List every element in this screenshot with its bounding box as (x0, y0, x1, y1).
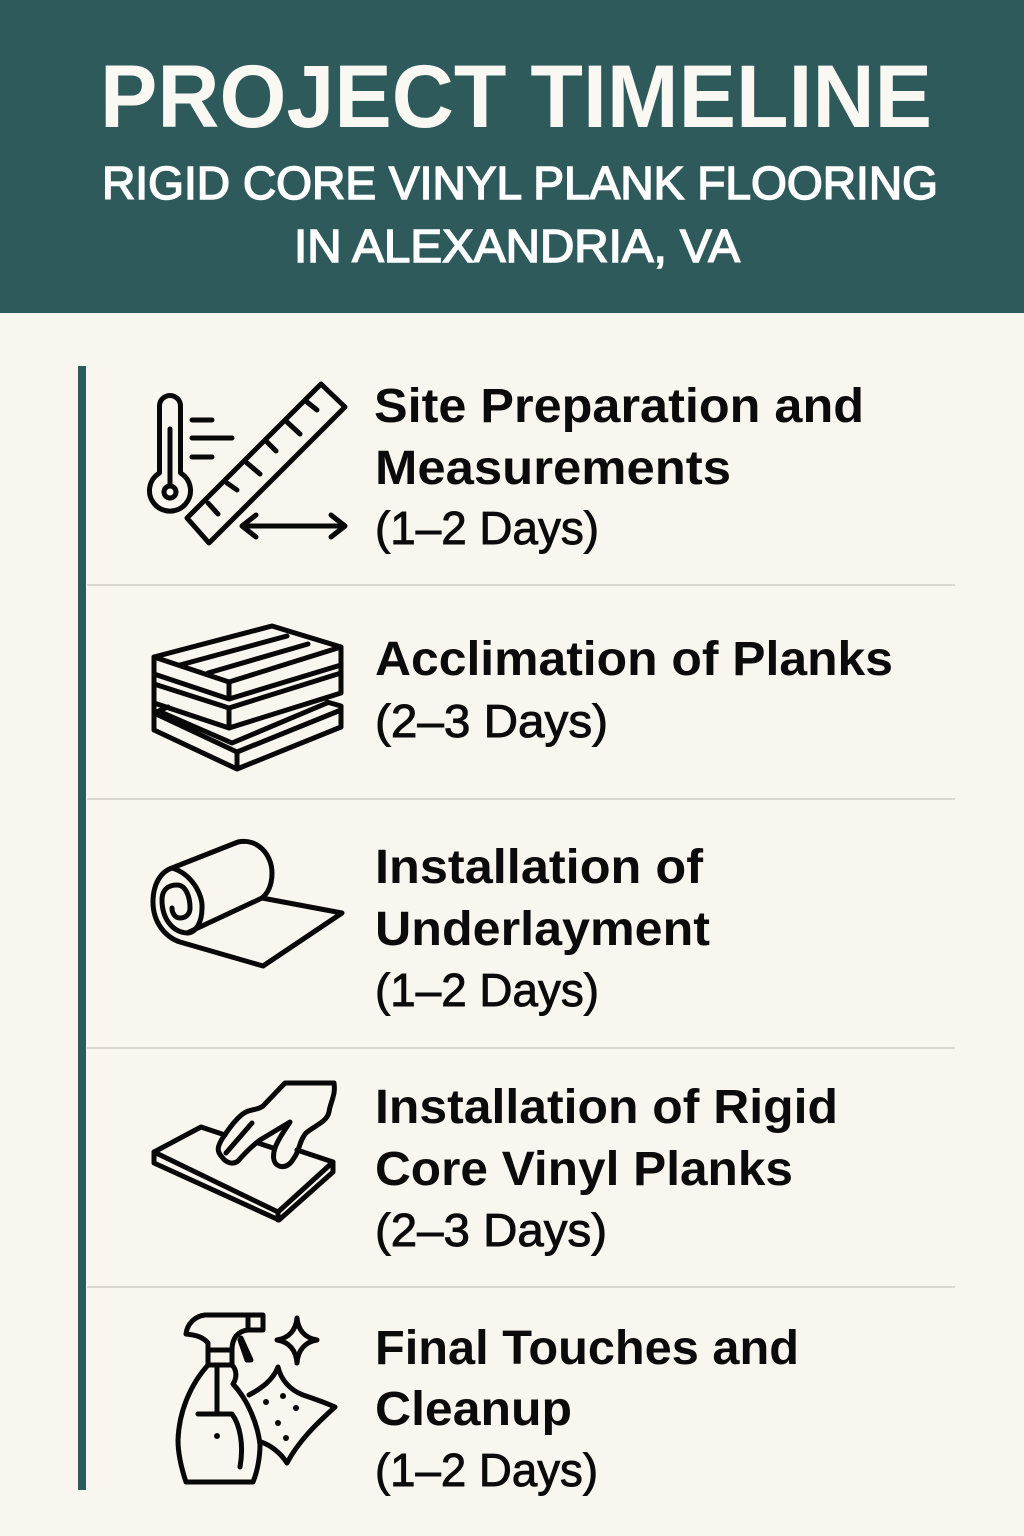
step 4: rigid core planks: Core Vinyl Planks (375, 1143, 793, 1196)
timeline vertical bar (78, 366, 86, 1490)
step 1 heading: Site Preparation and (374, 380, 864, 433)
step 1: site preparation: Measurements (375, 442, 731, 495)
step 2: acclimation (154, 626, 893, 769)
step 5 heading: Final Touches and (375, 1322, 799, 1375)
step 1 duration: (1–2 Days) (375, 502, 599, 554)
step 3 duration: (1–2 Days) (375, 964, 599, 1016)
header banner (0, 0, 1024, 313)
step 2 duration: (2–3 Days) (375, 695, 608, 747)
icon: hand placing plank (154, 1083, 334, 1220)
step 1: site preparation (149, 380, 864, 554)
icon: stacked planks (154, 626, 341, 769)
icon: thermometer, ruler and arrow (149, 384, 345, 543)
step 3: underlayment: Underlayment (375, 903, 710, 956)
icon: underlayment roll (153, 841, 342, 966)
subtitle line 2: IN ALEXANDRIA, VA (294, 220, 740, 272)
step 4: rigid core planks (154, 1081, 838, 1256)
step 3: underlayment (153, 841, 710, 1016)
step 4 duration: (2–3 Days) (375, 1204, 607, 1256)
step 3 heading: Installation of (375, 841, 704, 894)
step 2 heading: Acclimation of Planks (375, 633, 893, 686)
title: PROJECT TIMELINE (100, 46, 932, 146)
step 5 duration: (1–2 Days) (375, 1444, 598, 1496)
step 5: final touches: Cleanup (375, 1383, 572, 1436)
icon: spray bottle, sparkle and cloth (178, 1315, 335, 1482)
step 5: final touches (178, 1315, 799, 1496)
step 4 heading: Installation of Rigid (375, 1081, 838, 1134)
subtitle line 1: RIGID CORE VINYL PLANK FLOORING (102, 157, 938, 209)
